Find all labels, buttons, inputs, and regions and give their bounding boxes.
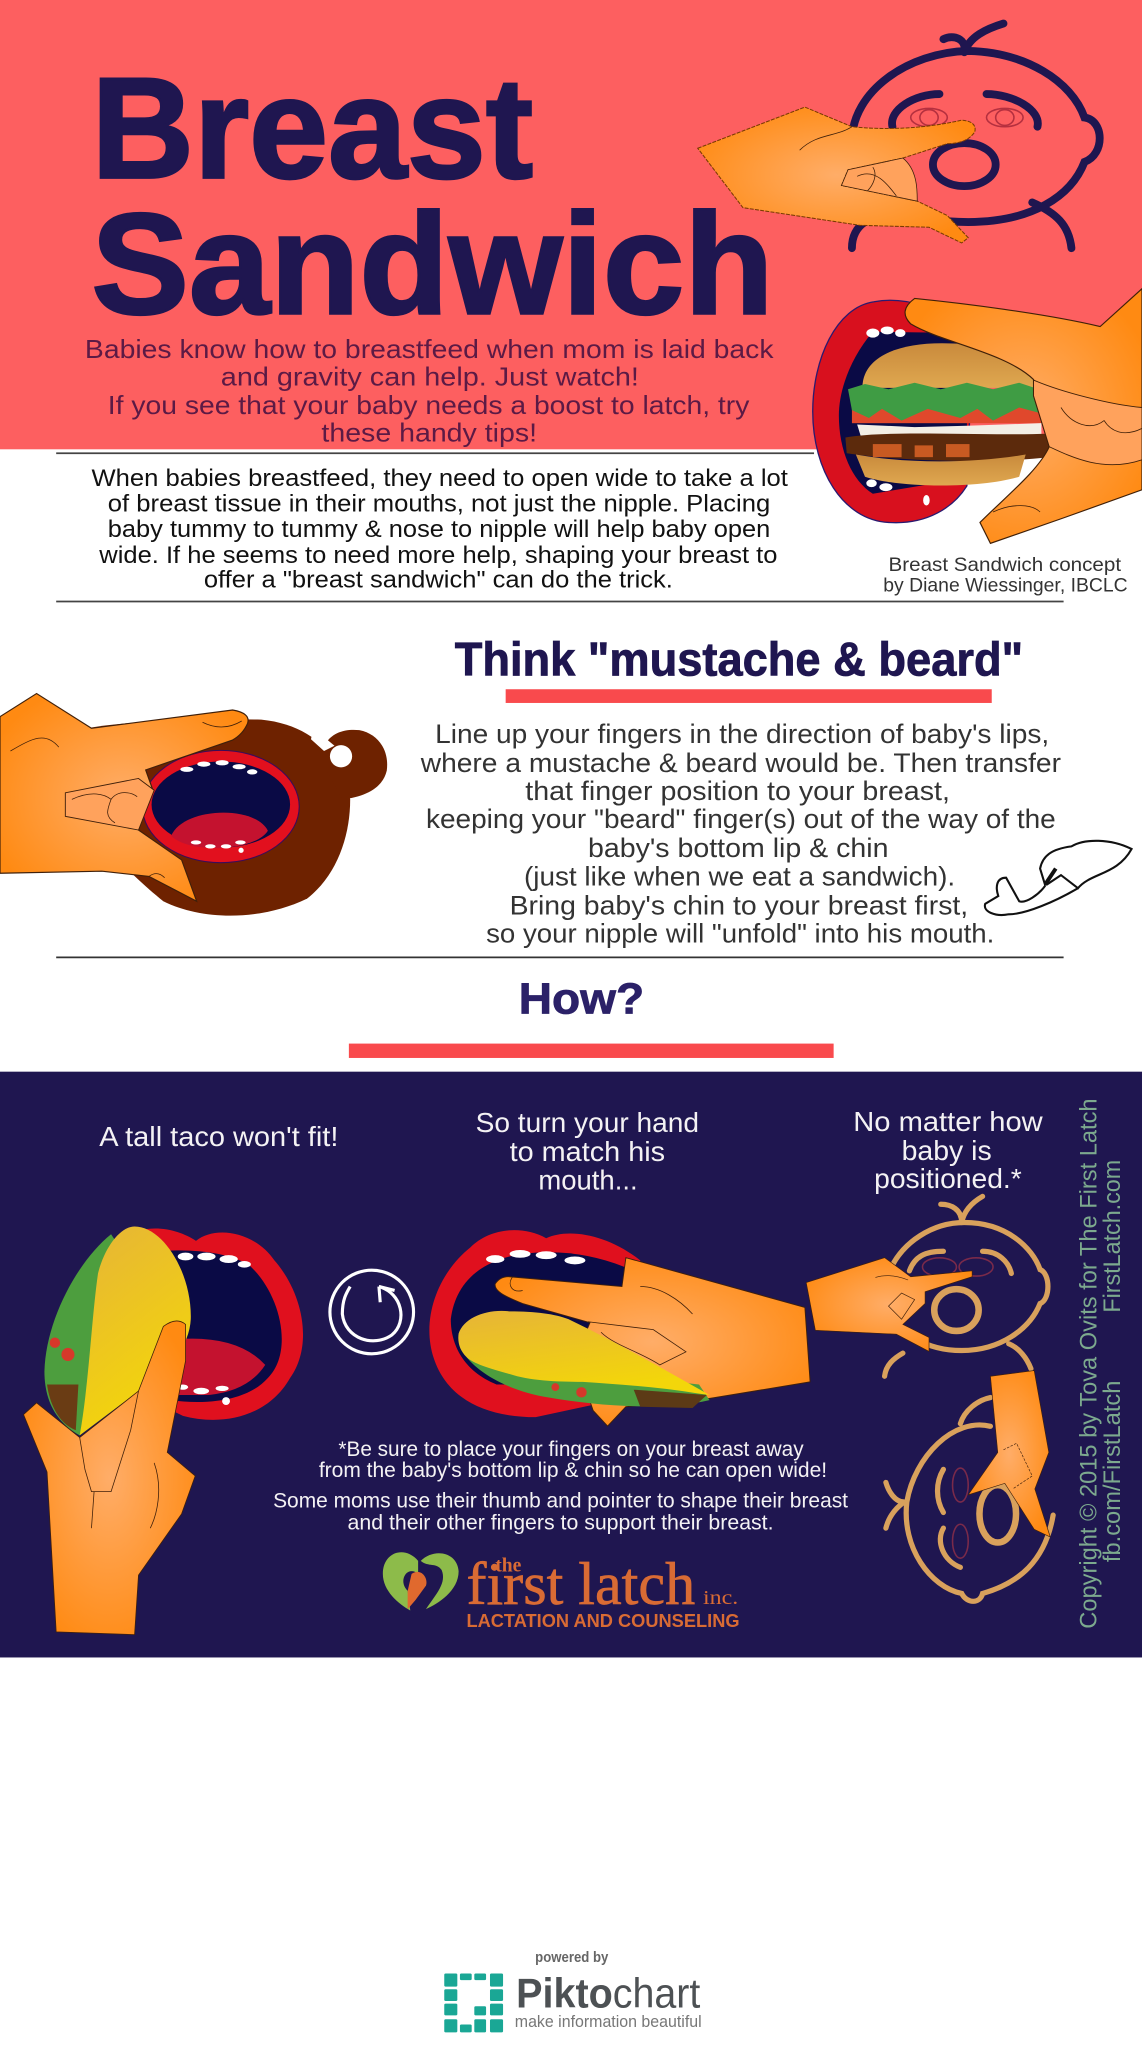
logo: the first latch: inc. [703,1588,738,1609]
explanatory paragraph [91,465,788,594]
teeth [178,1253,251,1405]
powered by Piktochart logo: make information beautiful [515,2013,702,2031]
intro text: and gravity can help. Just watch! [221,361,639,391]
illustration: hand on baby's mouth [0,694,387,916]
mustache and beard instructions: where a mustache & beard would be. Then transfer [420,748,1061,778]
divider [56,452,814,454]
copyright vertical text: Copyright © 2015 by Tova Ovits for The First Latch [1075,1098,1102,1629]
teeth [866,327,930,505]
mustache and beard instructions: Line up your fingers in the direction of baby's lips, [435,719,1049,749]
panel captions [99,1106,1043,1195]
powered by Piktochart logo: chart [613,1970,701,2017]
taco [44,1226,191,1435]
accent bar [506,689,992,703]
logo: the first latch [383,1550,740,1631]
panel captions: So turn your hand [476,1107,699,1138]
explanatory paragraph: baby tummy to tummy & nose to nipple will help baby open [108,516,770,543]
footnote text: *Be sure to place your fingers on your breast away [338,1438,804,1461]
footnote text: and their other fingers to support their breast. [348,1511,774,1534]
intro text: If you see that your baby needs a boost to latch, try [108,390,749,420]
taco horizontal [458,1311,710,1408]
logo: the first latch: first latch [466,1550,695,1617]
intro text: these handy tips! [321,417,537,447]
icon: line drawing of hand [985,841,1132,915]
illustration: tall taco at mouth [24,1226,303,1635]
mustache and beard instructions: Bring baby's chin to your breast first, [510,890,968,920]
copyright vertical text: fb.com/FirstLatch [1099,1381,1126,1562]
teeth [486,1250,585,1264]
intro text: Babies know how to breastfeed when mom is laid back [85,334,775,364]
heading: how: How? [519,976,644,1024]
navy panel [0,1072,1142,1657]
header panel [0,0,1142,449]
illustration: turned hand and taco at mouth [429,1230,810,1426]
explanatory paragraph: of breast tissue in their mouths, not just the nipple. Placing [108,490,770,517]
mustache and beard instructions: so your nipple will "unfold" into his mouth. [486,919,994,948]
mustache and beard instructions [420,719,1061,948]
divider [56,600,1064,602]
powered by Piktochart logo: powered by [535,1950,608,1966]
burger [845,343,1049,486]
divider [56,956,1064,958]
title: Breast [91,49,533,209]
footnote text: from the baby's bottom lip & chin so he can open wide! [319,1459,827,1482]
panel captions: A tall taco won't fit! [99,1121,338,1152]
powered by Piktochart logo: Pikto [516,1970,613,2017]
icon: rotate arrow [330,1270,414,1354]
copyright vertical text [1075,1098,1126,1629]
copyright vertical text: FirstLatch.com [1099,1160,1126,1313]
mustache and beard instructions: that finger position to your breast, [525,776,950,806]
illustration: baby sideways with hand [886,1371,1053,1601]
teeth [180,760,257,853]
heading: mustache and beard: Think "mustache & beard" [455,632,1023,685]
logo: the first latch: LACTATION AND COUNSELING [466,1610,740,1631]
mustache and beard instructions: keeping your "beard" finger(s) out of the way of the [426,804,1056,834]
icon: mouth eating burger with hand [813,289,1142,543]
credit caption: Breast Sandwich concept [889,555,1122,576]
panel captions: mouth... [538,1164,638,1195]
logo mark [383,1552,459,1610]
footnote text: Some moms use their thumb and pointer to shape their breast [273,1489,848,1512]
icon: Piktochart mark [444,1974,503,2032]
panel captions: No matter how [853,1106,1043,1137]
explanatory paragraph: When babies breastfeed, they need to open wide to take a lot [91,465,788,492]
panel captions: baby is [902,1135,992,1166]
footnote text [273,1438,848,1534]
panel captions: positioned.* [874,1163,1022,1194]
title: Sandwich [91,184,774,344]
explanatory paragraph: offer a "breast sandwich" can do the trick. [204,567,673,594]
intro text [85,334,775,447]
credit caption: by Diane Wiessinger, IBCLC [883,576,1128,597]
powered by Piktochart logo [444,1950,702,2032]
logo: the first latch: the [495,1555,522,1576]
illustration: baby facing up with hand [806,1196,1048,1376]
explanatory paragraph: wide. If he seems to need more help, shaping your breast to [98,542,777,569]
icon: baby face with hand [698,24,1100,248]
hand turned [495,1258,810,1426]
hand holding taco [24,1321,195,1635]
icon: hand on baby [698,107,975,243]
mustache and beard instructions: baby's bottom lip & chin [588,833,889,863]
credit caption [883,555,1128,597]
accent bar [349,1044,834,1058]
panel captions: to match his [510,1136,665,1167]
title [91,49,774,344]
mustache and beard instructions: (just like when we eat a sandwich). [524,862,955,892]
